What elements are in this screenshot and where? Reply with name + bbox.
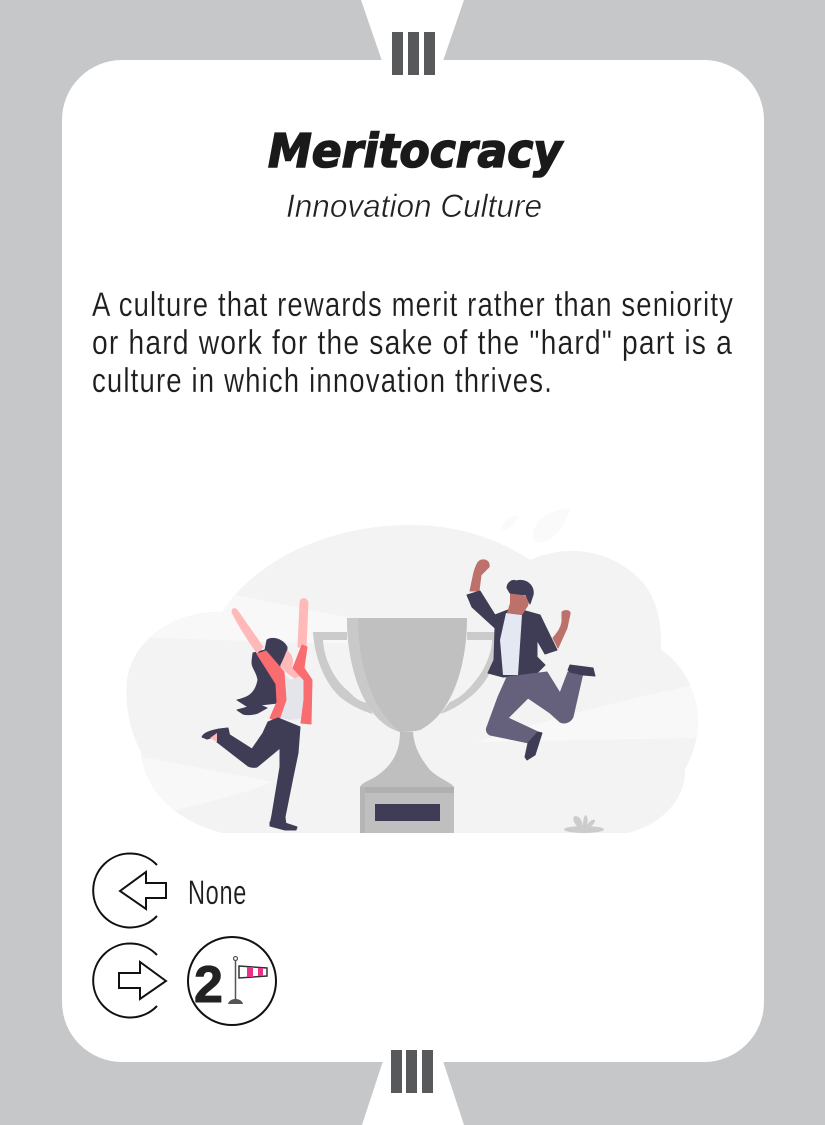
woman jacket	[257, 645, 312, 724]
woman hair back	[237, 638, 287, 715]
description text	[92, 286, 734, 400]
woman arms	[232, 598, 308, 653]
bottom notch	[362, 1061, 464, 1125]
trophy handles	[313, 632, 373, 714]
incoming arrow icon	[93, 854, 166, 928]
title: Meritocracy	[268, 124, 564, 178]
trophy plate	[375, 804, 440, 821]
badge number: 2	[194, 956, 223, 1014]
trophy	[313, 618, 501, 833]
woman shoes	[202, 728, 297, 830]
top notch	[361, 0, 464, 61]
man shirt	[500, 613, 522, 675]
man hair	[507, 580, 533, 604]
bottom level marker	[391, 1050, 433, 1093]
illustration: celebrating with trophy	[120, 508, 700, 833]
man arms	[470, 560, 570, 648]
woman face	[280, 650, 304, 683]
leaves	[502, 508, 570, 542]
man trousers	[486, 672, 583, 743]
man shoes	[525, 665, 595, 760]
woman figure	[202, 598, 312, 830]
description text: culture in which innovation thrives.	[92, 362, 553, 400]
wind badge	[188, 937, 276, 1025]
subtitle: Innovation Culture	[286, 188, 542, 224]
incoming label: None	[188, 874, 247, 912]
woman trousers	[217, 718, 300, 825]
trophy cup	[347, 618, 467, 732]
plant	[564, 815, 604, 833]
woman shirt	[278, 672, 308, 720]
outgoing arrow icon	[93, 944, 166, 1018]
trophy stem	[360, 732, 454, 787]
top level marker	[392, 32, 435, 75]
man head	[507, 590, 530, 615]
man jacket	[467, 591, 557, 677]
trophy base	[360, 787, 454, 833]
background cloud	[120, 525, 700, 833]
icon: windsock	[228, 956, 267, 1004]
man figure	[467, 560, 595, 760]
card panel	[62, 60, 764, 1062]
